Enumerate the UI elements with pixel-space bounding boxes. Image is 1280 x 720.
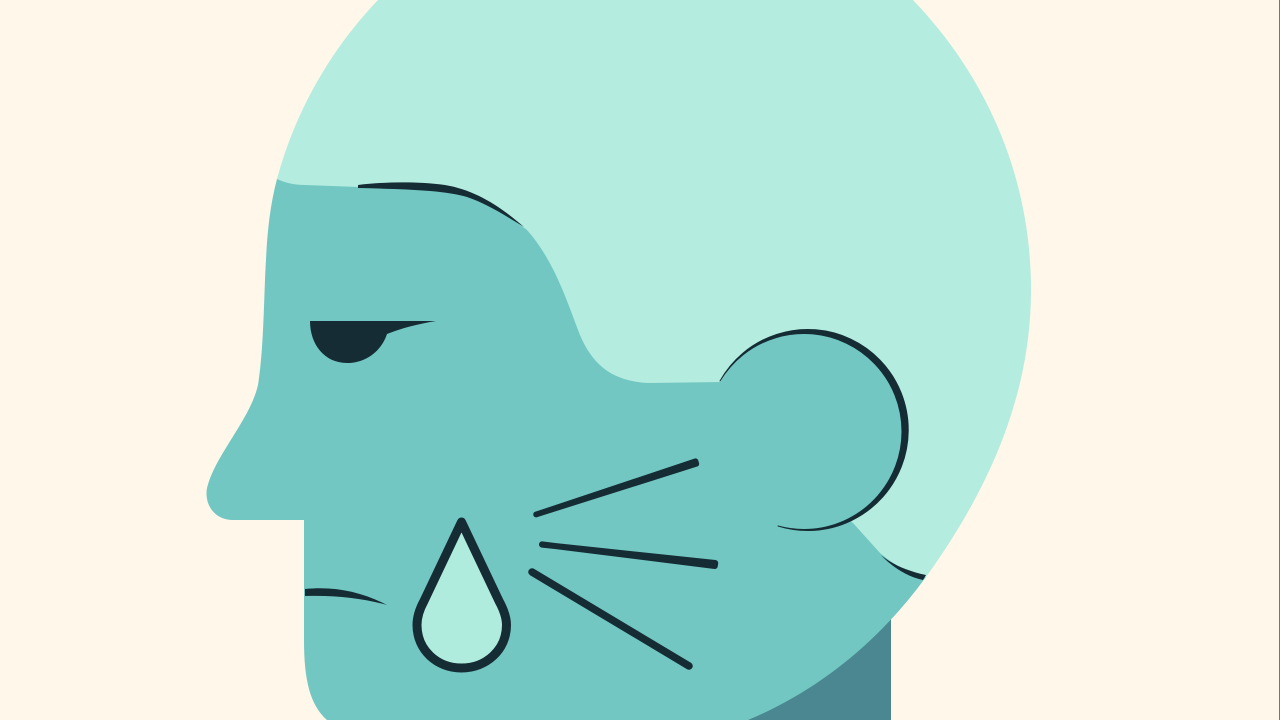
cheek line middle (542, 544, 715, 566)
cheek line lower (532, 572, 689, 666)
ear fill (708, 331, 906, 529)
right edge stripe (1279, 0, 1280, 720)
brow line (358, 182, 524, 227)
mouth line (305, 588, 387, 605)
neck (740, 617, 891, 720)
neck crease line (881, 555, 926, 580)
ear outline (720, 330, 908, 531)
tear drop (417, 522, 506, 668)
hair: light round head (277, 0, 1031, 577)
cheek line upper (536, 461, 696, 515)
face (207, 179, 926, 720)
closed eye (310, 321, 436, 363)
